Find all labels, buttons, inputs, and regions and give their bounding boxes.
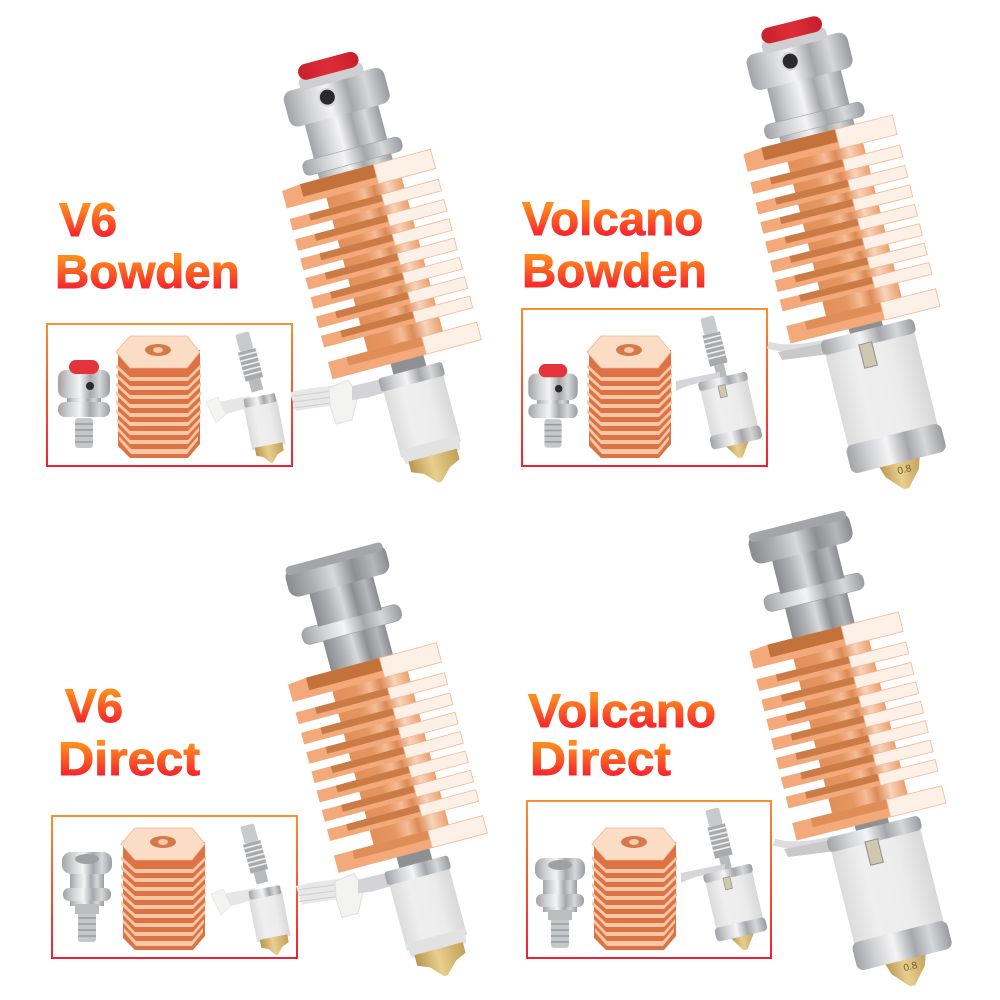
icon: copper heat sink <box>592 828 677 950</box>
hotend: Volcano Direct assembly <box>722 503 987 1000</box>
heading: Volcano Direct: Direct <box>530 733 671 786</box>
icon: copper heat sink <box>116 336 201 458</box>
icon: direct coupler <box>535 858 585 948</box>
icon: heat break and heater <box>676 315 766 464</box>
panel: Volcano Direct <box>527 503 987 1000</box>
heading: V6 Bowden: V6 <box>59 194 117 247</box>
inset: Volcano Bowden parts <box>522 309 767 466</box>
icon: copper heat sink <box>121 828 206 950</box>
hotend: V6 Bowden assembly <box>252 38 514 502</box>
icon: heat break and heater <box>206 331 289 466</box>
inset: V6 Bowden parts <box>47 324 292 466</box>
inset: Volcano Direct parts <box>527 801 771 958</box>
inset: V6 Direct parts <box>52 816 297 958</box>
icon: Bowden coupler <box>58 360 110 448</box>
heading: V6 Direct: V6 <box>65 680 123 733</box>
icon: heat break and heater <box>211 823 294 958</box>
heading: Volcano Direct: Volcano <box>528 685 716 738</box>
panel: V6 Direct <box>52 535 520 996</box>
panel: V6 Bowden <box>47 38 514 502</box>
icon: direct coupler <box>62 852 112 942</box>
heading: V6 Direct: Direct <box>58 733 200 786</box>
icon: copper heat sink <box>587 336 672 458</box>
icon: Bowden coupler <box>528 364 578 448</box>
heading: Volcano Bowden: Volcano <box>522 193 703 246</box>
panel: Volcano Bowden <box>522 3 981 507</box>
heading: V6 Bowden <box>55 194 240 299</box>
heading: V6 Bowden: Bowden <box>55 246 240 299</box>
heading: V6 Direct <box>58 680 200 786</box>
hotend: Volcano Bowden assembly <box>715 3 981 507</box>
hotend: V6 Direct assembly <box>259 535 520 996</box>
heading: Volcano Direct <box>528 685 716 786</box>
icon: heat break and heater <box>681 807 771 956</box>
heading: Volcano Bowden: Bowden <box>522 245 707 298</box>
heading: Volcano Bowden <box>522 193 707 298</box>
